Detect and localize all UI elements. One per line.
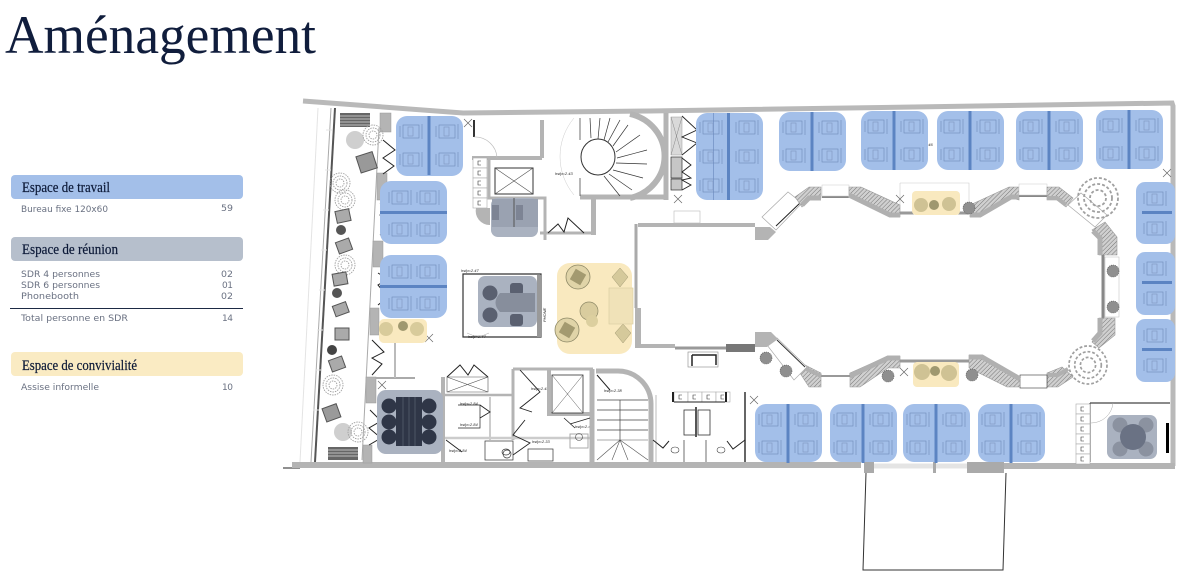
stair upper xyxy=(540,113,666,235)
lower rooms xyxy=(376,343,593,462)
seating lounge xyxy=(555,263,633,354)
zone bottom 2 xyxy=(830,404,897,463)
label heights: hsfp=2.47 xyxy=(468,334,486,339)
zone top 6 xyxy=(1096,110,1163,169)
legend: espace de convivialité: Espace de convivialité xyxy=(22,358,137,374)
terrace bounds xyxy=(300,108,379,462)
restrooms xyxy=(653,392,745,462)
seating west xyxy=(379,319,427,343)
label heights: hsfp=2.38 xyxy=(604,388,622,393)
terrace furniture xyxy=(322,113,383,460)
zone bottom 4 xyxy=(978,404,1045,463)
zone top 2 xyxy=(779,112,846,171)
label heights: hsfp=2.47 xyxy=(461,268,479,273)
legend: espace de réunion: 02 xyxy=(221,270,233,280)
phonebooth 2 room xyxy=(1076,403,1170,464)
floor plan xyxy=(283,101,1175,570)
legend panel xyxy=(10,175,243,393)
label heights: hsfp=2.33 xyxy=(532,439,550,444)
label heights: hsfp=2.43 xyxy=(555,171,573,176)
zone top 5 xyxy=(1016,111,1083,170)
meeting room 4 people xyxy=(478,276,537,327)
wall piers xyxy=(363,113,391,463)
central core upper xyxy=(464,119,545,240)
legend: espace de convivialité: 10 xyxy=(222,383,233,393)
title: Aménagement xyxy=(5,5,316,65)
legend: espace de travail: Espace de travail xyxy=(22,180,110,196)
meeting room 6 people xyxy=(377,390,443,454)
zone bottom 1 xyxy=(755,404,822,463)
legend: espace de convivialité xyxy=(11,352,243,393)
legend: espace de travail: 59 xyxy=(221,204,233,214)
zone left 1 xyxy=(396,116,463,176)
label heights xyxy=(449,142,1041,453)
lower annex outline xyxy=(863,473,1006,570)
yellow zones: informal seating xyxy=(379,191,960,387)
lower stair xyxy=(596,371,651,462)
zone right 1 xyxy=(1136,182,1175,244)
SDR room frame xyxy=(463,274,547,337)
label heights: hsfp=2.60 xyxy=(1023,187,1041,192)
label heights: hsfp=2.62 xyxy=(676,214,694,219)
legend: espace de réunion: 02 xyxy=(221,292,233,302)
legend: espace de travail: Bureau fixe 120x60 xyxy=(21,205,108,215)
zone top 4 xyxy=(937,111,1004,170)
right of stair cells xyxy=(671,116,697,203)
zone right 2 xyxy=(1136,252,1175,315)
label heights: hsfp=2.84 xyxy=(449,448,467,453)
blue zones: work desks xyxy=(380,110,1175,463)
grey zones: meeting rooms xyxy=(377,198,1170,464)
legend: espace de réunion: 01 xyxy=(222,281,233,291)
legend: espace de réunion: Espace de réunion xyxy=(22,242,119,258)
door chevrons left xyxy=(369,140,395,445)
label heights: hsfp=2.44 xyxy=(575,424,593,429)
label heights: hsfp=2.58 xyxy=(1023,380,1041,385)
label heights: hsfp=2.46 xyxy=(915,142,933,147)
central courtyard perimeter xyxy=(635,183,1119,388)
zone top 1 xyxy=(696,113,763,200)
zone top 3 xyxy=(861,111,928,170)
legend: espace de travail xyxy=(11,175,243,215)
zone left 2 xyxy=(380,181,447,244)
seating south xyxy=(913,362,959,387)
label heights: hsfp=2.63 xyxy=(825,187,843,192)
building walls xyxy=(283,101,1175,473)
zone bottom 3 xyxy=(903,404,970,463)
legend: espace de réunion: Total personne en SDR xyxy=(20,314,128,324)
legend: espace de réunion: 14 xyxy=(222,314,233,324)
SDR room frame: PHONE xyxy=(542,307,547,322)
phonebooth 1 xyxy=(491,198,538,237)
legend: espace de réunion xyxy=(10,237,243,324)
zone left 3 xyxy=(380,255,447,318)
legend: espace de réunion: SDR 4 personnes xyxy=(21,270,100,280)
label heights: hsfp=2.84 xyxy=(460,422,478,427)
label heights: hsfp=2.84 xyxy=(460,401,478,406)
zone right 3 xyxy=(1136,319,1175,382)
trees xyxy=(378,169,1171,404)
seating north xyxy=(912,191,960,215)
legend: espace de convivialité: Assise informelle xyxy=(21,383,99,393)
legend: espace de réunion: Phonebooth xyxy=(21,292,79,302)
legend: espace de réunion: SDR 6 personnes xyxy=(21,281,100,291)
label heights: hsfp=2.44 xyxy=(531,386,549,391)
